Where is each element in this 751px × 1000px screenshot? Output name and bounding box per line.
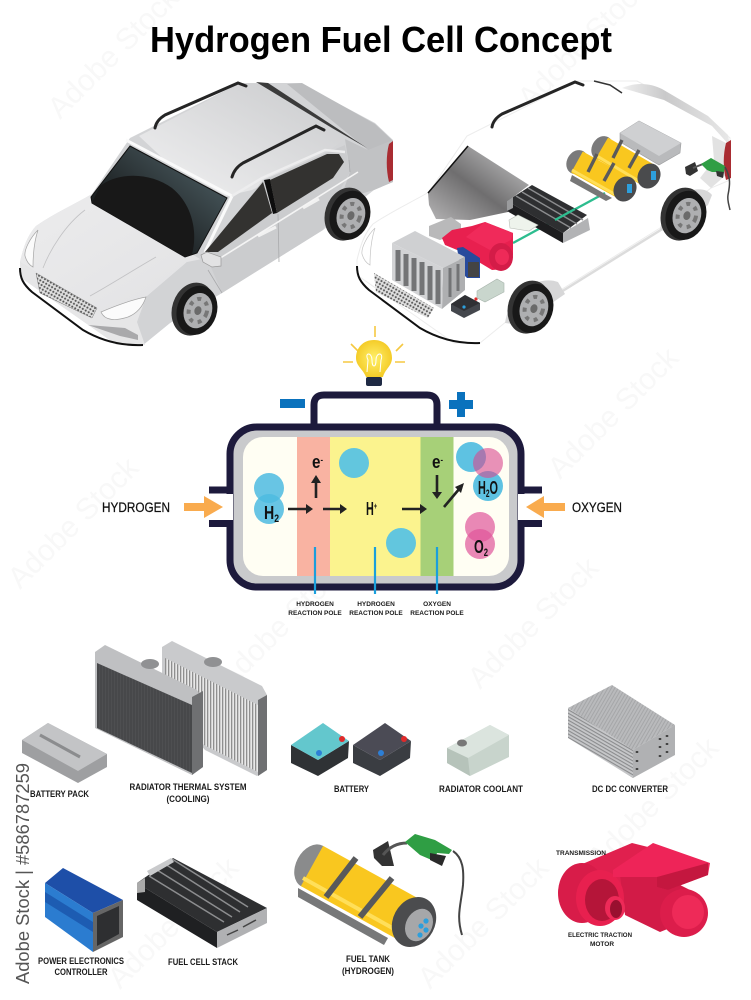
cabin edge	[428, 146, 468, 193]
motor body	[442, 222, 513, 270]
watermark: Adobe Stock	[542, 341, 686, 485]
top	[137, 858, 267, 932]
tank body	[577, 162, 624, 188]
atoms	[254, 473, 284, 524]
O2 label: 2	[484, 547, 488, 559]
casing	[22, 723, 107, 783]
tail light	[387, 141, 393, 182]
door handles	[258, 199, 319, 236]
controller face	[468, 262, 479, 277]
label second line: (HYDROGEN)	[342, 966, 394, 976]
tank front	[562, 146, 641, 206]
top	[353, 723, 411, 760]
right ports	[521, 490, 542, 524]
transmission label: TRANSMISSION	[556, 850, 606, 857]
dc converter	[429, 217, 461, 240]
hood	[20, 194, 205, 312]
rear fins	[165, 658, 258, 772]
car: exterior view	[20, 82, 393, 345]
label: RADIATOR COOLANT	[439, 784, 523, 794]
wheel arch rear	[660, 189, 712, 232]
roof rail near	[155, 83, 246, 128]
hose	[725, 167, 730, 210]
label: RADIATOR THERMAL SYSTEM	[130, 782, 246, 792]
label second line: CONTROLLER	[54, 967, 108, 977]
part: batteries	[291, 723, 411, 794]
terminal red	[474, 297, 478, 301]
left drum	[558, 863, 606, 923]
connectors	[637, 735, 667, 770]
hydrogen label: HYDROGEN	[102, 500, 170, 515]
left end	[287, 838, 337, 894]
front wheel	[165, 277, 224, 341]
red terminal	[339, 736, 345, 742]
label: FUEL CELL STACK	[168, 957, 238, 967]
left ports	[209, 490, 230, 524]
side	[137, 883, 217, 948]
stack corner	[507, 197, 513, 211]
part: fuel tank	[287, 834, 463, 976]
front radiator frame	[95, 645, 203, 775]
H2O label: 2	[486, 488, 490, 500]
top wire	[314, 395, 437, 424]
yellow body	[312, 866, 408, 919]
radiator side	[442, 257, 465, 309]
right face	[633, 725, 675, 778]
controller	[457, 247, 480, 278]
label: BATTERY	[334, 784, 369, 794]
grip	[716, 171, 724, 178]
headlight left	[362, 228, 375, 265]
minus sign	[280, 399, 305, 408]
part: radiator coolant	[439, 725, 523, 794]
hose link	[693, 164, 703, 168]
car body	[20, 83, 393, 345]
tank body	[602, 148, 648, 175]
valve	[627, 184, 632, 193]
watermark: Adobe Stock	[412, 851, 556, 995]
side	[447, 748, 470, 776]
outlet ring	[605, 896, 625, 920]
roof rail far	[232, 126, 324, 177]
handle	[147, 858, 174, 876]
ridge	[40, 735, 80, 757]
battery	[451, 295, 480, 318]
side panel	[205, 145, 350, 293]
end slots	[227, 920, 256, 935]
green handle	[701, 158, 725, 172]
electrolyte band	[330, 437, 420, 576]
front mesh	[97, 663, 192, 773]
water molecule	[456, 442, 503, 501]
ribs	[149, 859, 248, 922]
face	[93, 900, 123, 952]
hydrogen atoms	[456, 442, 503, 501]
highlight	[303, 878, 396, 930]
left edge	[137, 878, 145, 893]
body	[620, 875, 700, 932]
hose link	[383, 843, 407, 855]
red terminal	[401, 736, 407, 742]
green pipe over stack	[555, 209, 575, 220]
stock credit: Adobe Stock | #586787259	[13, 763, 33, 984]
H2 label: 2	[274, 513, 279, 525]
base plate	[298, 888, 388, 945]
fuel cell stack	[507, 185, 590, 243]
rear quarter	[340, 139, 393, 200]
door lines	[208, 160, 350, 293]
right drum	[660, 889, 708, 937]
end plate	[400, 904, 438, 946]
pole label 1: HYDROGEN	[296, 601, 334, 608]
motor label second line: MOTOR	[590, 941, 614, 948]
fuel cell diagram	[102, 326, 622, 617]
blue terminal	[316, 750, 322, 756]
front lip	[20, 268, 143, 345]
tank rear end	[562, 146, 592, 178]
windshield	[91, 146, 227, 257]
front fender	[137, 258, 222, 345]
trunk shading	[622, 84, 730, 146]
rear corner shading	[700, 136, 726, 188]
right inlet gap	[518, 494, 527, 520]
fuel nozzle	[685, 158, 730, 210]
cabin cutaway	[428, 146, 529, 220]
tail light	[724, 140, 731, 180]
tank highlight	[572, 170, 618, 196]
electron right: -	[440, 455, 443, 465]
H2 molecule	[254, 473, 284, 525]
left fins	[568, 708, 633, 778]
windshield shadow	[92, 176, 194, 257]
outlet hole	[610, 900, 622, 918]
oxygen label: OXYGEN	[572, 500, 622, 515]
watermark: Adobe Stock	[2, 451, 146, 595]
watermark: Adobe Stock	[102, 851, 246, 995]
pole label 3: OXYGEN	[423, 601, 451, 608]
radiator assembly	[392, 231, 465, 309]
green pipe	[513, 193, 605, 243]
car body	[357, 81, 730, 343]
side	[45, 883, 93, 952]
proton: H	[366, 499, 379, 519]
part: power electronics controller	[38, 868, 124, 977]
H2O label: O	[490, 478, 498, 498]
hydrogen arrow	[184, 496, 223, 518]
rear side window	[270, 154, 344, 213]
side sill	[561, 228, 664, 292]
right cap	[672, 895, 704, 929]
oxygen arrow	[526, 496, 565, 518]
body	[353, 741, 411, 776]
rays	[343, 326, 405, 362]
body	[291, 741, 349, 776]
label: DC DC CONVERTER	[592, 784, 668, 794]
headlight left	[25, 230, 38, 267]
tank highlight	[597, 156, 642, 183]
H2 label: H	[264, 503, 277, 523]
plus sign	[449, 392, 473, 417]
top	[447, 725, 509, 758]
grille	[36, 273, 97, 318]
ion circle bottom	[386, 528, 416, 558]
front side	[192, 691, 203, 775]
rear spoiler	[256, 82, 367, 148]
rear radiator	[162, 641, 267, 776]
hose	[453, 851, 463, 935]
part: radiator thermal system	[95, 641, 267, 804]
tank rear end	[587, 132, 617, 164]
cell interior	[243, 437, 509, 576]
stack end	[563, 218, 590, 243]
valve	[417, 918, 429, 938]
rear wheel	[654, 182, 713, 246]
electron right: e	[432, 452, 442, 472]
front side window	[205, 182, 272, 252]
screen	[97, 906, 119, 946]
hydrogen pole band	[297, 437, 330, 576]
battery top	[451, 295, 480, 311]
leader lines	[315, 547, 437, 594]
headlight right	[101, 297, 146, 320]
roof	[139, 84, 345, 196]
part: dc dc converter	[568, 685, 675, 794]
light bulb	[343, 326, 405, 386]
band 2	[360, 878, 392, 917]
front bumper	[20, 262, 146, 345]
socket	[373, 841, 394, 866]
motor label: ELECTRIC TRACTION	[568, 932, 632, 939]
side fins	[450, 264, 458, 297]
front wheel	[501, 275, 560, 339]
label: BATTERY PACK	[30, 789, 89, 799]
radiator front	[392, 243, 443, 309]
battery pack top	[620, 121, 681, 156]
stripe	[45, 892, 93, 932]
end cap	[495, 249, 509, 265]
part: electric traction motor	[556, 843, 710, 948]
terminal blue	[462, 305, 466, 309]
electron left: -	[320, 455, 323, 465]
top box	[466, 222, 513, 250]
mirror	[201, 252, 221, 267]
red motor	[442, 222, 513, 271]
roof rail	[492, 82, 583, 127]
side highlight	[214, 172, 358, 262]
rear cap	[204, 657, 222, 667]
spoiler line	[594, 81, 622, 93]
left inlet gap	[224, 494, 233, 520]
dark battery	[353, 723, 411, 776]
top box lower	[657, 863, 708, 890]
oxygen pole band	[420, 437, 454, 576]
cell casing	[230, 427, 521, 587]
front lip	[357, 266, 480, 343]
bumper vent	[88, 325, 138, 340]
right end	[383, 889, 445, 955]
top	[568, 685, 675, 750]
watermark: Adobe Stock	[582, 731, 726, 875]
label: FUEL TANK	[346, 954, 390, 964]
front cap	[141, 659, 159, 669]
cradle	[570, 175, 612, 201]
rear housing	[580, 843, 660, 890]
battery sides	[451, 295, 480, 318]
radiator top	[392, 231, 465, 268]
grille	[374, 273, 434, 318]
end plate	[217, 908, 267, 948]
top box	[613, 843, 710, 890]
oxygen atom	[473, 448, 503, 478]
filament	[367, 354, 382, 372]
glass	[356, 340, 392, 377]
roof edge highlight	[126, 140, 232, 252]
top	[291, 723, 349, 760]
watermark: Adobe Stock	[462, 551, 606, 695]
battery pack	[620, 121, 681, 165]
motor end	[489, 243, 513, 271]
part: battery pack	[22, 723, 107, 799]
arrows across cell	[288, 475, 460, 509]
ion circle top	[339, 448, 369, 478]
rear wheel	[318, 182, 377, 246]
trunk	[287, 83, 392, 150]
teal battery	[291, 723, 349, 776]
atoms	[465, 512, 495, 559]
stack ribs	[516, 188, 583, 228]
front drum	[576, 870, 624, 926]
band 1	[326, 858, 356, 897]
tank bands	[613, 140, 639, 168]
radiator fins	[398, 250, 438, 304]
pole label 2: REACTION POLE	[349, 610, 403, 617]
label second line: (COOLING)	[166, 794, 210, 804]
pole label 3: REACTION POLE	[410, 610, 464, 617]
hood creases	[43, 210, 156, 296]
tank front end	[609, 172, 641, 206]
O2 molecule	[465, 512, 495, 559]
arrowheads	[306, 475, 464, 514]
socket	[685, 162, 698, 176]
top	[45, 868, 123, 913]
rear side	[258, 695, 267, 776]
tank rear	[587, 132, 665, 193]
H2O label: H	[478, 478, 491, 498]
watermark: Adobe Stock	[212, 551, 356, 695]
pole label 1: REACTION POLE	[288, 610, 342, 617]
electron left: e	[312, 452, 322, 472]
stack top	[507, 185, 587, 233]
car: cutaway view with fuel cell parts	[357, 81, 731, 343]
cap	[457, 740, 467, 746]
tank	[447, 725, 509, 776]
coolant tank	[477, 279, 504, 302]
stack lower dark	[507, 201, 563, 243]
nozzle body	[405, 834, 452, 861]
cone	[585, 879, 619, 921]
base	[366, 377, 382, 386]
small modules	[509, 215, 538, 231]
nozzle grip	[430, 853, 446, 866]
proton: +	[374, 501, 377, 511]
tank bands	[588, 154, 614, 181]
label: POWER ELECTRONICS	[38, 956, 124, 966]
O2 label: O	[474, 537, 488, 557]
blue terminal	[378, 750, 384, 756]
valve	[651, 171, 656, 180]
wheel arch front	[505, 280, 565, 325]
pole label 2: HYDROGEN	[357, 601, 395, 608]
pillar	[264, 179, 277, 214]
top	[22, 723, 107, 771]
part: fuel cell stack	[137, 858, 267, 967]
title: Hydrogen Fuel Cell Concept	[150, 19, 612, 60]
tank front end	[633, 159, 665, 193]
window top highlight	[232, 150, 345, 196]
